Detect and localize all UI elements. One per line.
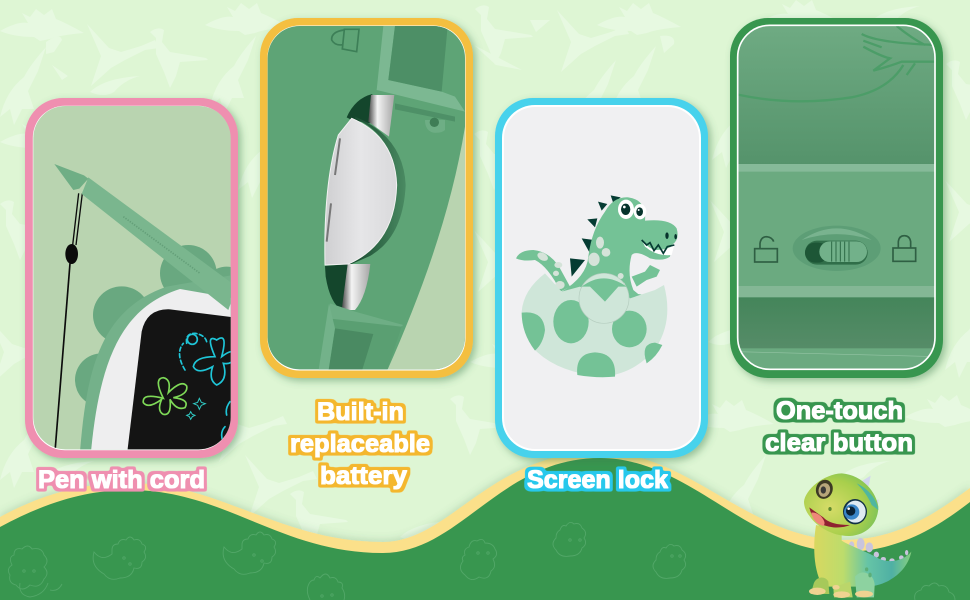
label: one-touch clear button: One-touch (776, 397, 903, 425)
label: built-in replaceable battery: battery (320, 462, 407, 490)
label: built-in replaceable battery: Built-in (317, 398, 404, 426)
panel: screen lock (495, 98, 708, 458)
photo: battery compartment (265, 23, 472, 373)
label: one-touch clear button: clear button (765, 429, 913, 457)
panel: clear button (730, 18, 943, 378)
label: pen with cord: Pen with cord (38, 466, 205, 494)
panel: battery (260, 18, 473, 378)
label: built-in replaceable battery: replaceable (290, 430, 430, 458)
label: one-touch clear button (765, 397, 913, 457)
panel: pen with cord (25, 98, 252, 458)
wave band: green floor with line dinos (0, 458, 970, 600)
icon: hatching dinosaur in egg (516, 195, 678, 377)
photo: pen and tablet corner (33, 106, 231, 450)
wave band: yellow edge (0, 452, 970, 600)
photo: lock switch close-up (735, 23, 942, 372)
icon: baby dinosaur mascot (804, 473, 911, 598)
label: screen lock: Screen lock (527, 466, 668, 494)
label: built-in replaceable battery (290, 398, 430, 490)
